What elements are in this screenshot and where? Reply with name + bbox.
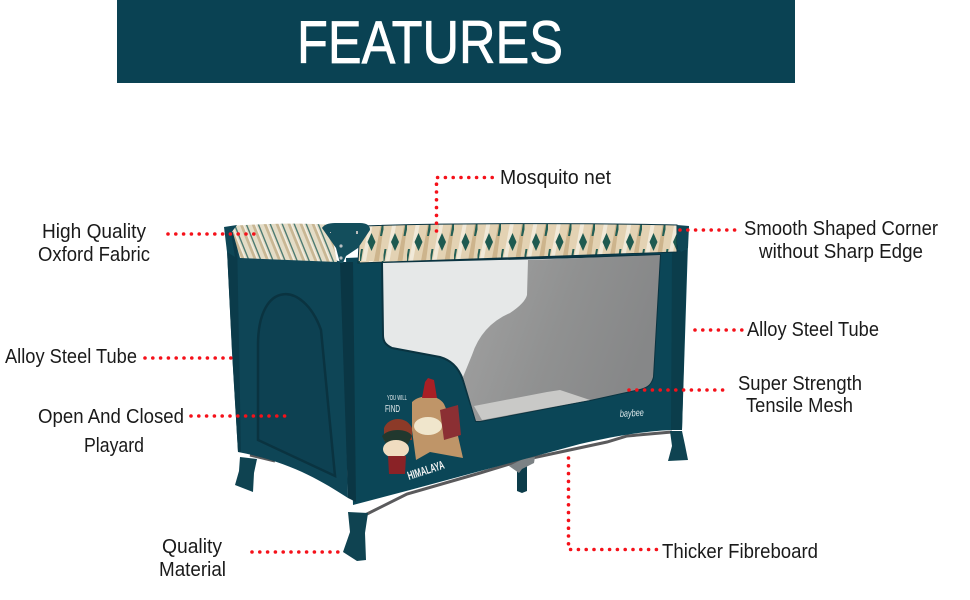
callout: quality material: Quality bbox=[162, 536, 222, 558]
brand logo: baybee bbox=[620, 408, 644, 420]
corner screws bbox=[330, 231, 358, 234]
left panel bbox=[226, 230, 348, 498]
left fabric band bbox=[231, 224, 337, 262]
Himalaya artwork: HIMALAYA bbox=[406, 458, 446, 483]
callout: open and closed playard: Playard bbox=[84, 435, 144, 457]
callout: high quality oxford fabric: High Quality bbox=[42, 221, 146, 243]
title banner bbox=[117, 0, 795, 83]
left edge tube bbox=[226, 230, 241, 452]
left foot bbox=[235, 457, 257, 492]
callout: thicker fibreboard: Thicker Fibreboard bbox=[662, 541, 818, 563]
centre corner cap bbox=[322, 223, 370, 263]
window back bbox=[382, 255, 660, 421]
callout: open and closed playard: Open And Closed bbox=[38, 406, 184, 428]
right corner cap bbox=[677, 225, 689, 252]
Himalaya artwork: YOU WILL bbox=[387, 395, 407, 402]
callout: smooth shaped corner bbox=[680, 218, 938, 263]
callout: smooth shaped corner: without Sharp Edge bbox=[758, 241, 923, 263]
callout: super strength tensile mesh: Super Strength bbox=[738, 373, 862, 395]
front panel bbox=[346, 244, 688, 505]
mid bracket bbox=[509, 457, 535, 473]
callout: alloy steel tube right: Alloy Steel Tube bbox=[747, 319, 879, 341]
callout: smooth shaped corner: Smooth Shaped Corner bbox=[744, 218, 938, 240]
callout: high quality oxford fabric bbox=[38, 221, 256, 266]
mesh bbox=[463, 255, 660, 421]
callout: mosquito net bbox=[436, 167, 611, 231]
callout: mosquito net: Mosquito net bbox=[500, 167, 611, 189]
callout: high quality oxford fabric: Oxford Fabric bbox=[38, 244, 150, 266]
callout: open and closed playard bbox=[38, 406, 287, 457]
front fabric band bbox=[358, 224, 677, 263]
middle foot bbox=[517, 464, 527, 493]
callout: super strength tensile mesh bbox=[629, 373, 862, 417]
Himalaya artwork bbox=[382, 378, 463, 483]
callout: quality material bbox=[159, 536, 340, 581]
right post bbox=[671, 250, 687, 430]
mattress bbox=[474, 390, 590, 420]
centre foot bbox=[343, 512, 368, 561]
title banner: FEATURES bbox=[297, 9, 563, 76]
callout: thicker fibreboard bbox=[568, 458, 818, 563]
left corner cap bbox=[224, 225, 237, 257]
Himalaya artwork: FIND bbox=[385, 404, 400, 415]
under-frame support bars bbox=[250, 432, 672, 515]
callout: quality material: Material bbox=[159, 559, 226, 581]
callout: alloy steel tube left: Alloy Steel Tube bbox=[5, 346, 137, 368]
callout: super strength tensile mesh: Tensile Mesh bbox=[746, 395, 853, 417]
playard product illustration bbox=[224, 223, 689, 561]
right foot bbox=[668, 431, 688, 461]
door arch bbox=[258, 294, 335, 476]
corner post bbox=[340, 262, 356, 502]
